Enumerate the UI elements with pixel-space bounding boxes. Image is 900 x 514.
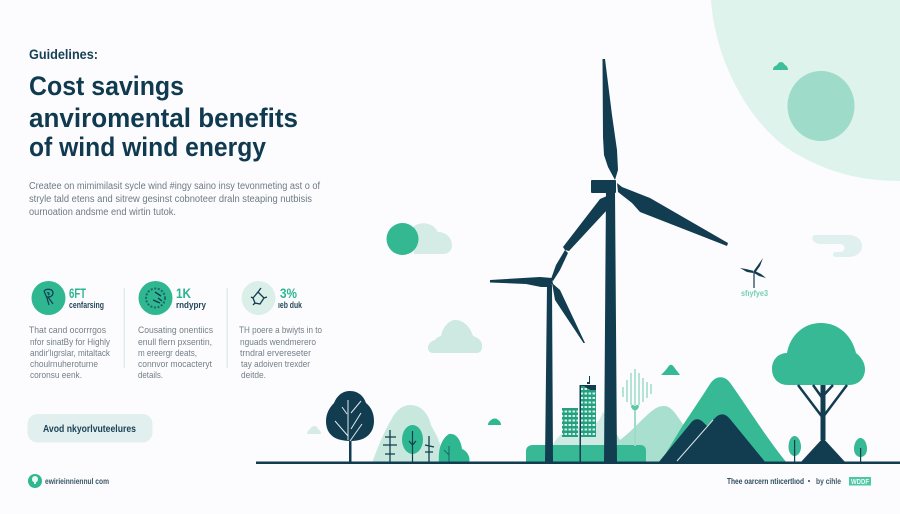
blade: lower left [563,196,607,251]
sun panel: top right circle [711,0,900,181]
oval green tree [402,425,423,463]
title: Cost savings [29,71,184,101]
stat description: enull flern pxsentin, [138,337,212,348]
footer credit: Thee oarcern ntiıcertlıod [727,476,804,486]
stat description [29,325,110,381]
intro text block [29,181,320,218]
blade: left [490,277,553,287]
stat description: choulrnuheroturne [30,359,98,370]
stat 2: 1K [138,281,213,381]
stat value: 3% [280,285,297,301]
left green hill and trees [372,405,470,463]
large green tree [772,323,865,463]
title: anviromental benefits [29,103,298,133]
stat label: rndypry [176,300,206,310]
icon: footer logo [28,474,42,488]
small green cloud center [488,418,501,425]
stat 1: 6FT [29,281,110,381]
footer credit [727,476,871,486]
small tree left [788,436,801,463]
stat description: That cand ocorrrgos [29,325,106,336]
tower [604,190,617,463]
green base platform [526,445,646,463]
stat description: coronsu eenk. [30,370,82,381]
bare tree right [425,436,434,463]
stat description: TH poere a bwiyts in to [239,325,322,336]
second wind turbine [490,250,585,463]
stat label: ıeb duk [278,300,303,310]
button [28,414,152,442]
tree trunk and branches [798,385,847,418]
building left [562,408,578,437]
blade: up [551,250,568,281]
footer website: ewirieinniennul com [45,476,109,486]
pale cloud right [812,235,862,257]
button: Avod nkyorlvuteelures [43,423,136,435]
ground line [256,462,900,464]
intro text block: stryle tald etens and sitrew gesinst cobnoteer draln steaping nutbisis [29,194,312,205]
badge: WDDF [851,477,869,486]
tree base [800,438,846,463]
icon: pale circle with leaf outline [242,281,276,315]
middle cloud [428,320,482,353]
stat description: deitde. [241,370,266,381]
intro text block: ournoation andsme end wirtin tutok. [29,207,176,218]
small green cloud near mountains [661,365,680,375]
small tree right [854,438,867,463]
stat description: nguads wendmerero [240,337,316,348]
stat description: andir'lıgrslar, mitaltack [30,348,110,359]
icon: green circle with leaf glyph [138,281,172,315]
blade: right [552,283,585,343]
antenna with striped signal [623,369,651,446]
subheading: Guidelines: [29,46,98,62]
inner sun disc [788,71,854,141]
dark tree [326,391,374,463]
pale hill behind city [540,406,700,463]
small pale cloud [307,426,321,434]
small wind turbine icon [740,258,768,298]
stat description: trndral ervereseter [240,348,311,359]
dark mountain [658,414,766,463]
pale hill [372,405,444,463]
stat description [239,325,322,381]
nacelle [591,180,616,193]
footer website [28,474,109,488]
blade: up [602,59,618,180]
mountains [658,377,787,463]
large wind turbine [563,59,728,463]
green bush [439,434,470,463]
stat description: Cousating onentiics [138,325,213,336]
bare tree left [383,430,397,463]
tree crown [772,323,865,385]
cloud with green disc [386,223,452,255]
small green cloud [773,62,788,70]
stat 3: 3% [239,281,322,381]
stat value: 1K [176,285,191,301]
building tall [580,376,596,437]
icon: green circle with loop glyph [32,281,66,315]
stat description: connvor mocacteryt [138,359,212,370]
stat label: cenfarsing [69,300,104,310]
green mountain [660,377,787,463]
city buildings [562,376,596,463]
stat description: m ereergr deats, [138,348,197,359]
stat description: tay adoiven trexder [241,359,310,370]
intro text block: Createe on mimimilasit sycle wind #ingy saino insy tevonmeting ast o of [29,181,320,192]
footer credit: by cihle [816,476,841,486]
title: of wind wind energy [29,132,266,162]
stat value: 6FT [69,285,86,301]
tower [545,285,553,463]
stat description: nfor sinatBy for Highly [30,337,110,348]
stat description [138,325,213,381]
title [29,71,298,162]
small turbine label: sfıyfye3 [741,289,768,298]
blade: right [617,183,728,246]
stat description: details. [138,370,163,381]
